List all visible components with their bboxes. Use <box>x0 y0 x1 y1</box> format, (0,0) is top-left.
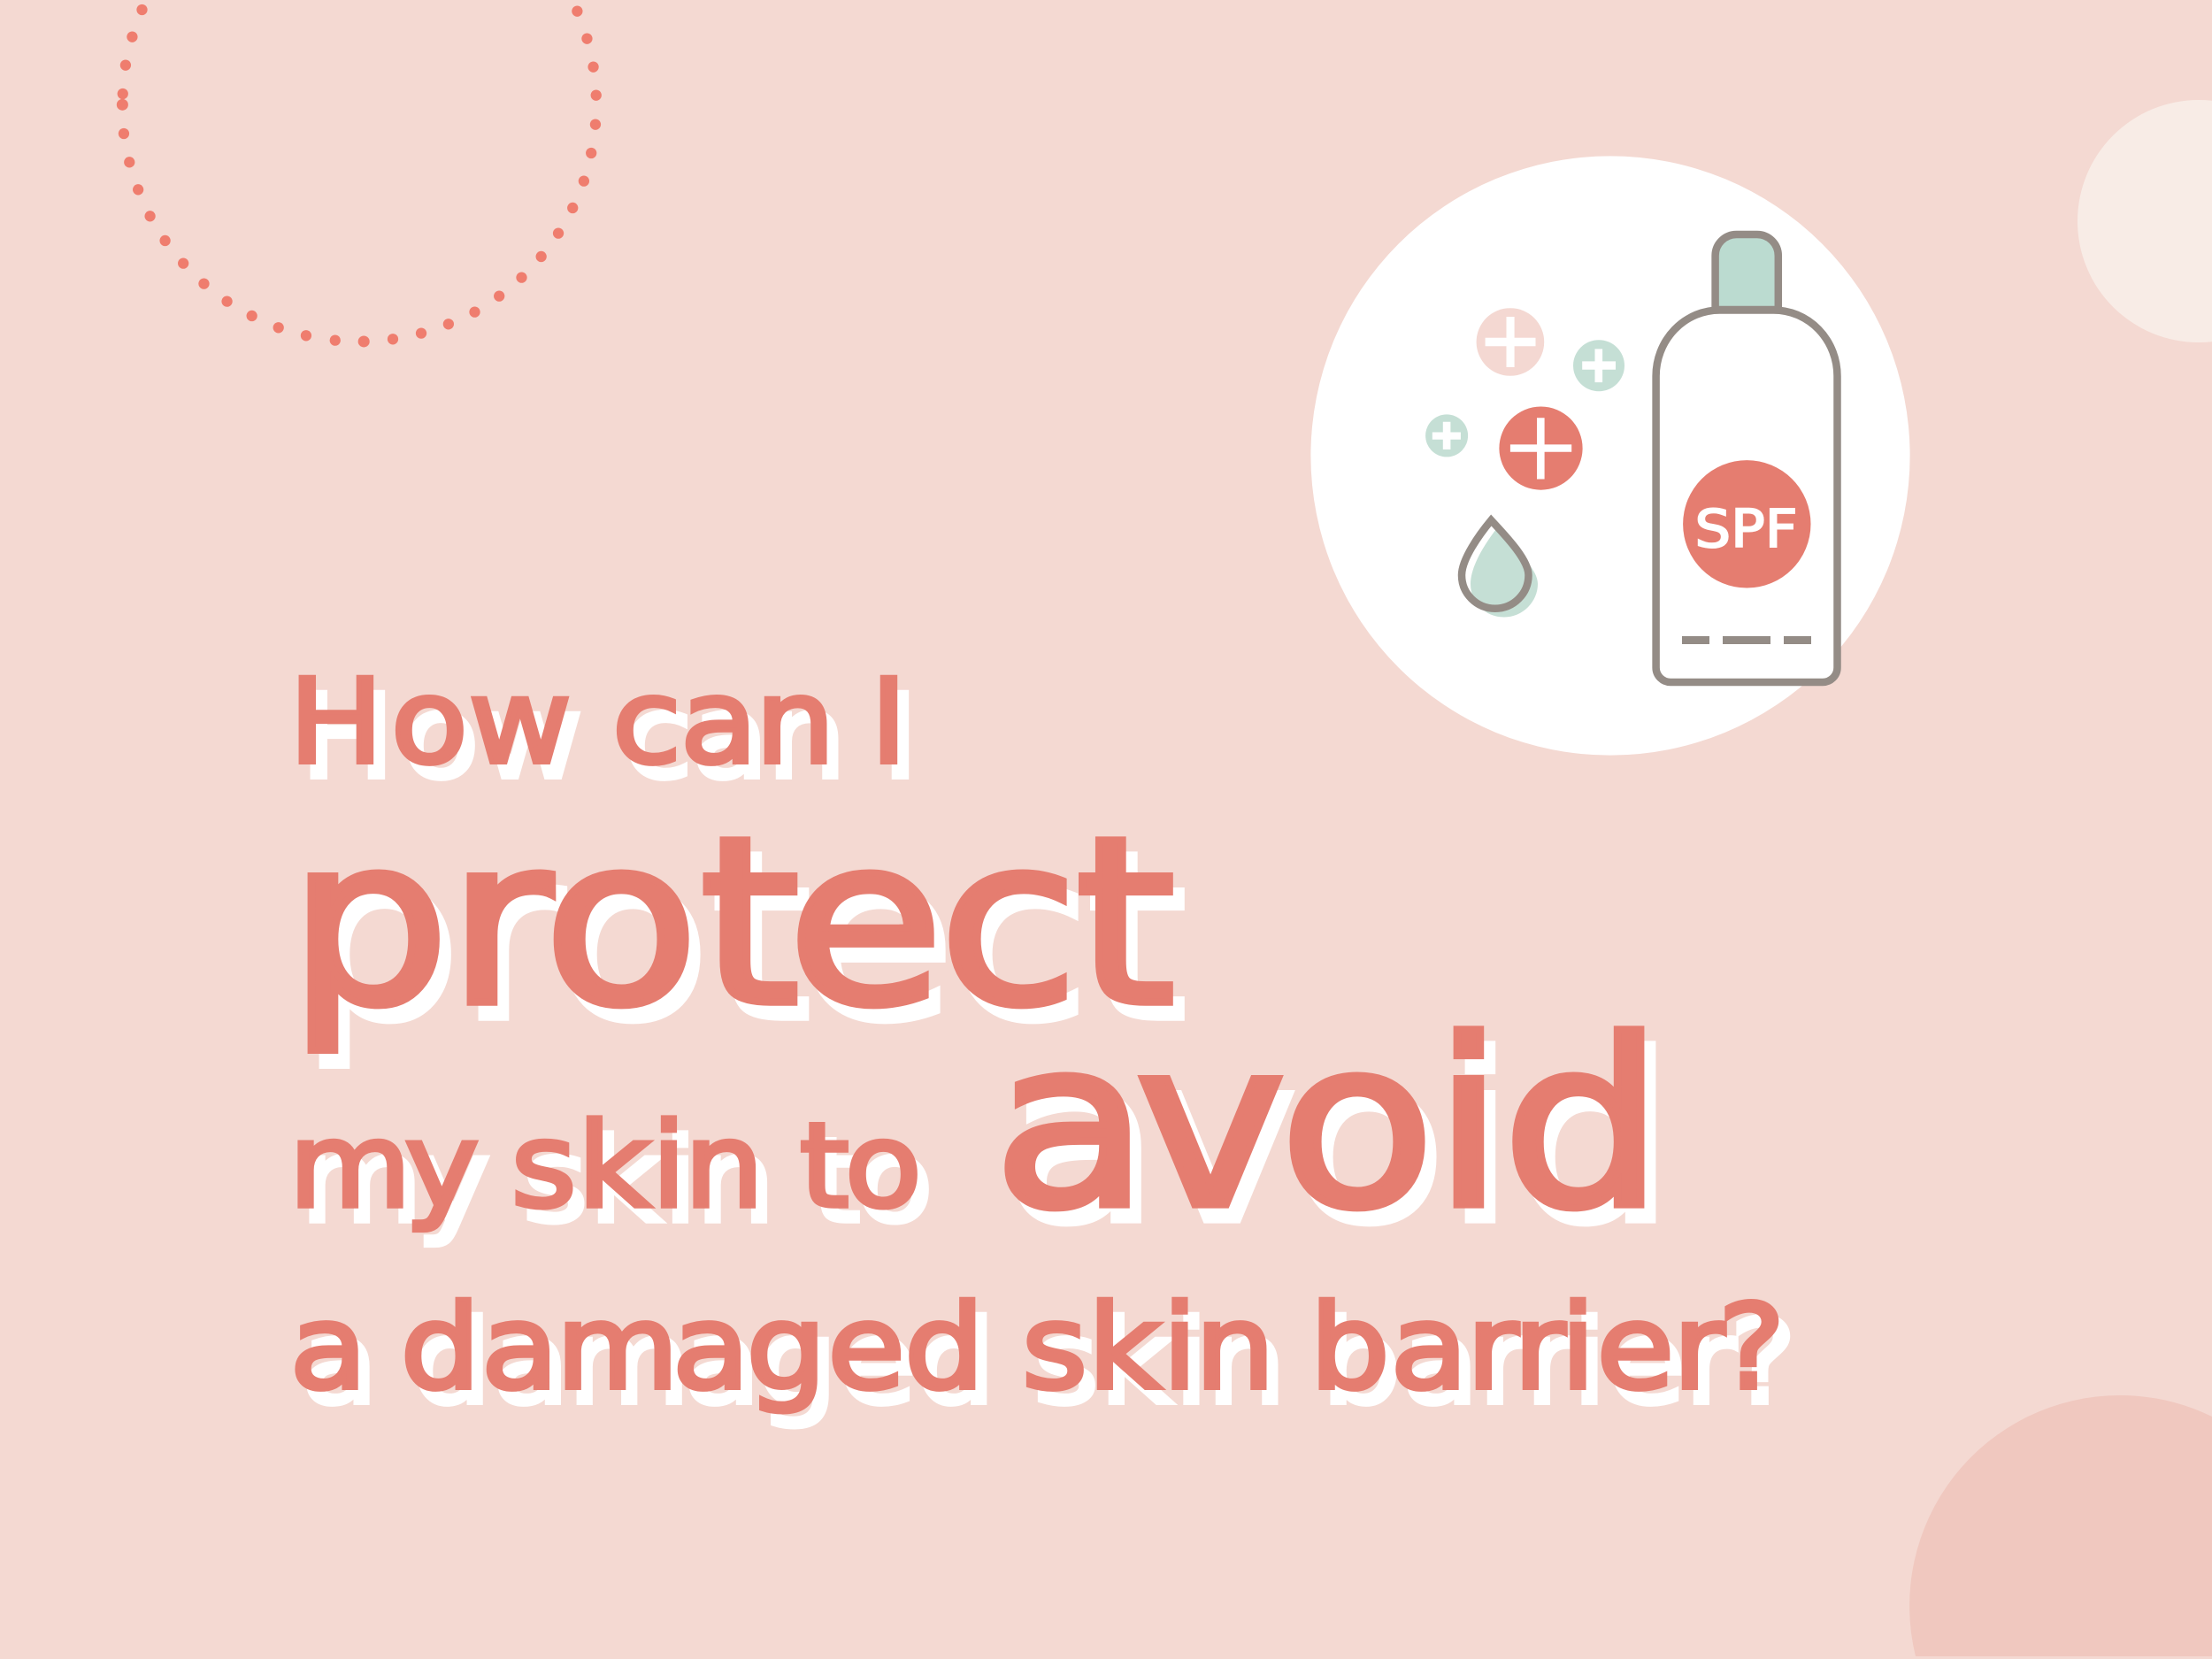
headline word: avoid: avoid <box>994 990 1663 1260</box>
decorative circle: bottom right <box>1909 1395 2212 1656</box>
headline word: protect: protect <box>300 803 1187 1072</box>
bottle body <box>1656 310 1837 682</box>
icon: plus bubble green right <box>1573 340 1624 391</box>
icon: plus bubble pink <box>1477 308 1544 376</box>
icon: water drop <box>1462 520 1538 618</box>
bottle cap <box>1716 234 1778 310</box>
headline line: a damaged skin barrier?: a damaged skin barrier? <box>302 1294 1797 1431</box>
label dashes <box>1682 636 1811 644</box>
SPF label: SPF <box>1695 498 1798 559</box>
headline word: protect: protect <box>288 787 1175 1057</box>
decorative circle: top right <box>2078 100 2212 342</box>
white illustration circle <box>1310 156 1910 756</box>
icon: plus bubble coral <box>1499 407 1583 490</box>
SPF label <box>1683 460 1811 588</box>
headline line: How can I: How can I <box>300 669 918 805</box>
headline line: How can I: How can I <box>288 654 907 790</box>
headline line: my skin to: my skin to <box>300 1113 933 1249</box>
headline line: my skin to: my skin to <box>288 1098 922 1234</box>
headline line: a damaged skin barrier?: a damaged skin barrier? <box>290 1279 1786 1416</box>
dotted arc <box>117 4 602 347</box>
icon: plus bubble green left <box>1425 414 1468 457</box>
headline word: avoid: avoid <box>1005 1005 1675 1275</box>
headline <box>288 654 1797 1431</box>
icon: SPF bottle <box>1656 234 1837 682</box>
